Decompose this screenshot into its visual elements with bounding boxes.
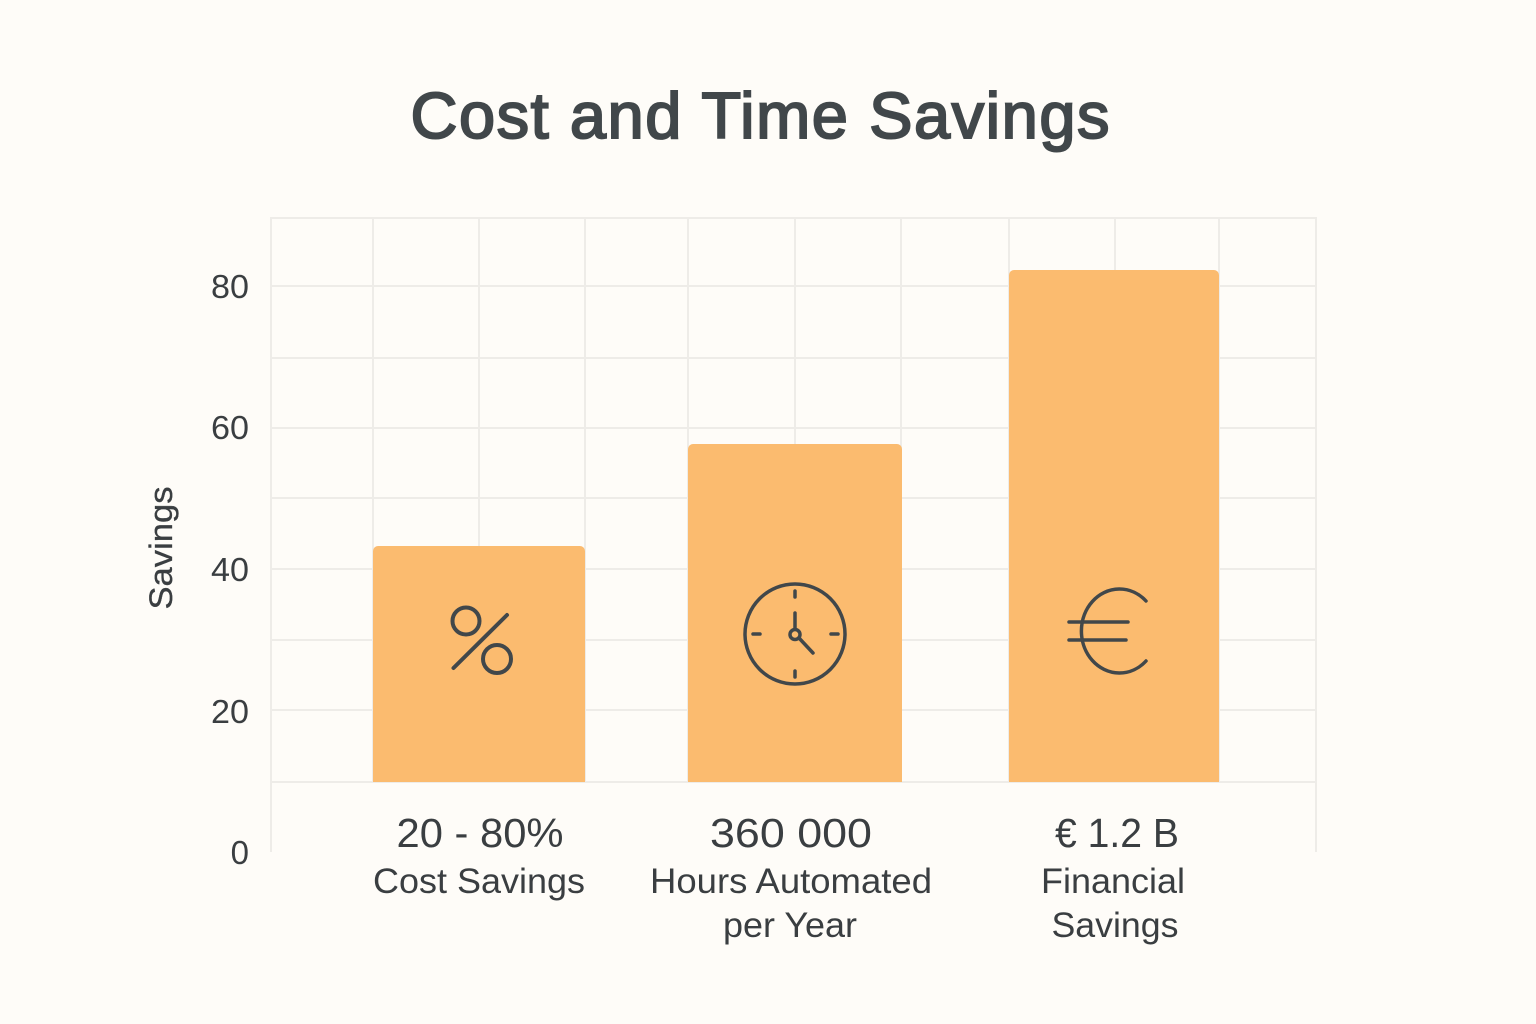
y-axis tick labels: 20 [211, 693, 249, 730]
label: hours automated: 360 000 [710, 810, 872, 856]
y-axis title: Savings [143, 486, 179, 610]
y-axis tick labels: 0 [231, 834, 249, 871]
label: hours automated [650, 810, 932, 945]
y-axis tick labels [211, 268, 249, 871]
label: cost savings: Cost Savings [373, 862, 585, 901]
label: financial savings [1041, 810, 1185, 945]
y-axis tick labels: 40 [211, 551, 249, 588]
y-axis tick labels: 60 [211, 409, 249, 446]
label: financial savings: Savings [1052, 906, 1178, 945]
title: Cost and Time Savings [410, 79, 1110, 152]
label: hours automated: Hours Automated [650, 862, 932, 901]
bar: cost savings [373, 546, 585, 782]
icon: percent [452, 608, 511, 673]
bar: hours automated [688, 444, 902, 782]
label: hours automated: per Year [723, 906, 857, 945]
label: cost savings: 20 - 80% [396, 810, 564, 856]
label: cost savings [373, 810, 585, 901]
icon: clock [745, 584, 845, 684]
bar: financial savings [1009, 270, 1219, 782]
label: financial savings: Financial [1041, 862, 1185, 901]
y-axis tick labels: 80 [211, 268, 249, 305]
label: financial savings: € 1.2 B [1055, 810, 1179, 856]
icon: euro [1069, 589, 1146, 673]
